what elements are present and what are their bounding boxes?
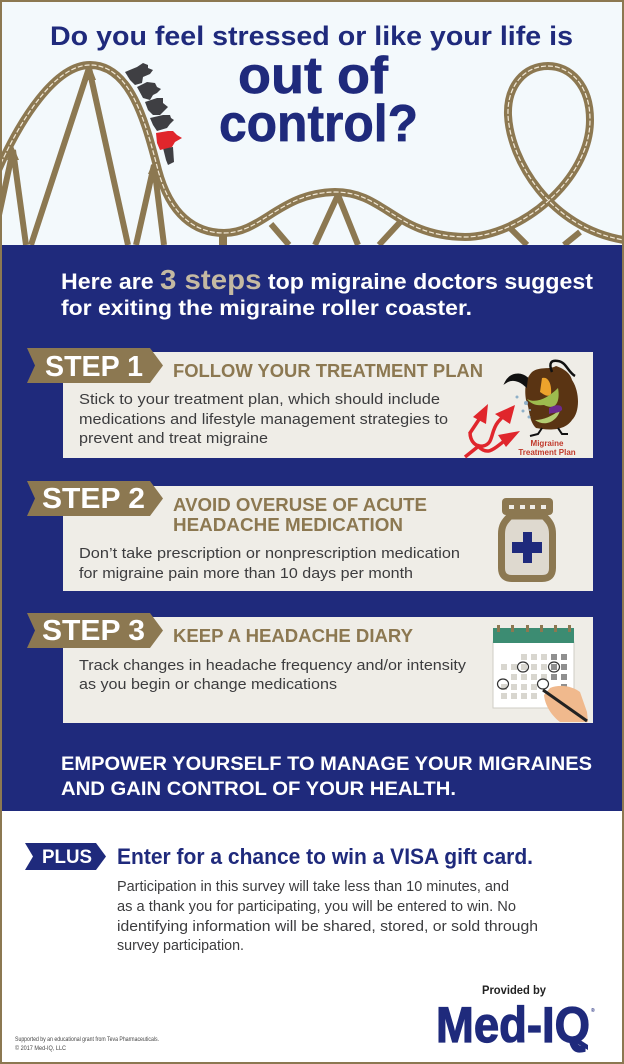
- step 3 banner: [27, 613, 163, 648]
- title: [50, 21, 573, 153]
- step 2 body: Don’t take prescription or nonprescription medication: [79, 545, 460, 562]
- icon: monster body: [525, 366, 578, 430]
- panel: step 1: [27, 348, 593, 458]
- icon: red trident: [465, 404, 520, 457]
- footer credits: [15, 1037, 159, 1052]
- panel: navy steps background: [2, 245, 622, 811]
- step 2 banner: STEP 2: [42, 483, 145, 515]
- survey description: identifying information will be shared, stored, or sold through: [117, 918, 538, 935]
- red car: [156, 131, 182, 150]
- footer credits: © 2017 Med-IQ, LLC: [15, 1045, 67, 1052]
- roller coaster illustration: [0, 62, 624, 245]
- step 2 body: for migraine pain more than 10 days per month: [79, 565, 413, 582]
- monster label: Migraine: [531, 439, 564, 448]
- intro text: [61, 264, 594, 320]
- intro text: for exiting the migraine roller coaster.: [61, 297, 472, 320]
- provided by label: Provided by: [482, 985, 547, 997]
- icon: migraine monster and trident: [465, 361, 578, 457]
- intro text: Here are 3 steps top migraine doctors suggest: [61, 264, 594, 295]
- footer credits: Supported by an educational grant from Teva Pharmaceuticals.: [15, 1037, 159, 1043]
- step 3 body: [79, 657, 467, 693]
- step 2 body: [79, 545, 460, 582]
- survey description: [117, 878, 538, 954]
- survey description: survey participation.: [117, 937, 244, 954]
- gift card heading: Enter for a chance to win a VISA gift card.: [117, 844, 533, 869]
- monster label: Treatment Plan: [518, 448, 576, 457]
- step 1 body: prevent and treat migraine: [79, 430, 268, 447]
- step 1 heading: FOLLOW YOUR TREATMENT PLAN: [173, 361, 483, 381]
- step 3 heading: KEEP A HEADACHE DIARY: [173, 626, 413, 646]
- step 3 banner: STEP 3: [42, 615, 145, 647]
- Med-IQ logo: ®: [591, 1007, 595, 1014]
- step 3 body: as you begin or change medications: [79, 676, 337, 693]
- title: Do you feel stressed or like your life is: [50, 21, 573, 51]
- survey description: as a thank you for participating, you will be entered to win. No: [117, 898, 516, 915]
- monster label: [518, 439, 576, 457]
- title: control?: [219, 95, 418, 153]
- Med-IQ logo: Med-IQ: [436, 997, 590, 1053]
- icon: calendar with hand: [493, 625, 588, 722]
- coaster cars with riders: [125, 63, 182, 165]
- step 2 heading: HEADACHE MEDICATION: [173, 515, 403, 535]
- step 1 body: medications and lifestyle management strategies to: [79, 411, 448, 428]
- title: out of: [238, 47, 389, 105]
- hand and pen: [544, 686, 588, 722]
- plus banner: PLUS: [42, 847, 92, 868]
- panel: step 2: [27, 481, 593, 591]
- step 2 heading: AVOID OVERUSE OF ACUTE: [173, 495, 427, 515]
- step 2 banner: [27, 481, 163, 516]
- step 1 banner: STEP 1: [45, 351, 143, 383]
- call to action: AND GAIN CONTROL OF YOUR HEALTH.: [61, 779, 456, 800]
- survey description: Participation in this survey will take less than 10 minutes, and: [117, 878, 509, 895]
- step 1 body: Stick to your treatment plan, which should include: [79, 391, 440, 408]
- panel: header sky: [1, 1, 623, 246]
- step 3 body: Track changes in headache frequency and/or intensity: [79, 657, 467, 674]
- step 1 banner: [27, 348, 163, 383]
- call to action: EMPOWER YOURSELF TO MANAGE YOUR MIGRAINES: [61, 754, 592, 775]
- panel: step 3: [27, 613, 593, 723]
- call to action: [61, 754, 592, 800]
- step 1 body: [79, 391, 448, 447]
- plus banner: [25, 843, 106, 870]
- icon: medicine bottle: [502, 498, 553, 578]
- step 2 heading: [173, 495, 427, 535]
